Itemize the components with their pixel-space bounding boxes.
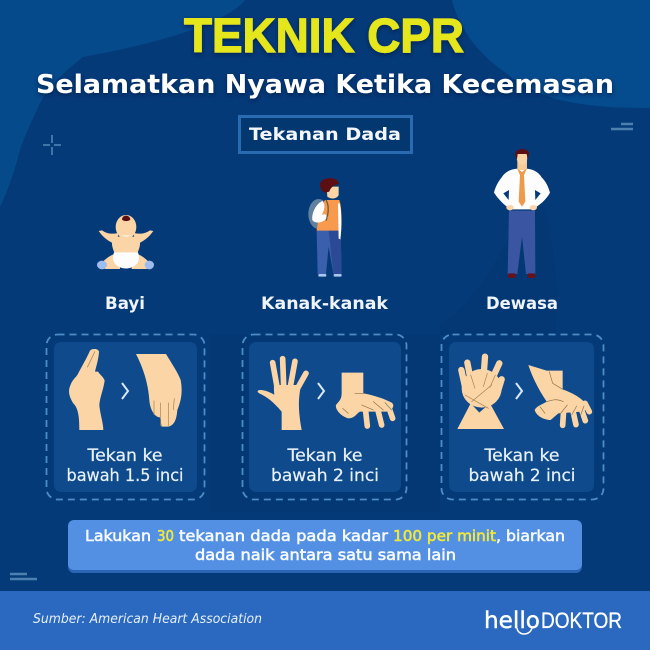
label: Kanak-kanak: Kanak-kanak: [261, 294, 389, 314]
callout text line 1: 30: [157, 527, 174, 545]
icon: sparkle decoration: [43, 135, 61, 155]
icon: adult man with tie: [494, 149, 550, 278]
heading: Tekanan Dada: Tekanan Dada: [249, 125, 401, 145]
text: bawah 2 inci: bawah 2 inci: [468, 466, 576, 485]
text: bawah 2 inci: bawah 2 inci: [271, 466, 379, 485]
icon: baby: [97, 215, 154, 269]
callout text line 1: Lakukan: [85, 527, 151, 545]
label: Dewasa: Dewasa: [486, 294, 558, 314]
logo: helloDOKTOR: hello: [484, 608, 540, 634]
icon: claw hand pressing: [336, 373, 393, 426]
icon: chevron: [122, 383, 128, 399]
label: Bayi: Bayi: [105, 294, 145, 314]
panel: Dewasa technique: [442, 334, 604, 500]
logo: helloDOKTOR: [484, 608, 622, 634]
logo: helloDOKTOR: DOKTOR: [541, 608, 622, 633]
callout: compression rate: [68, 520, 582, 573]
text: bawah 1.5 inci: bawah 1.5 inci: [66, 466, 184, 485]
icon: chevron: [516, 383, 522, 399]
icon: hands pressing chest: [528, 365, 589, 425]
icon: lines decoration bottom left: [10, 574, 37, 579]
panel: Kanak-kanak technique: [242, 334, 406, 500]
panel: Bayi technique: [46, 334, 204, 500]
text: Tekan ke: Tekan ke: [483, 446, 560, 465]
text: Tekan ke: Tekan ke: [86, 446, 162, 465]
subtitle: Selamatkan Nyawa Ketika Kecemasan: [36, 70, 614, 100]
icon: interlocked hands: [457, 357, 504, 429]
title: TEKNIK CPR: [184, 10, 464, 63]
callout text line 1: , biarkan: [496, 527, 565, 545]
heading: Tekanan Dada: [240, 116, 412, 152]
footer band: [0, 591, 650, 650]
icon: open hand: [258, 359, 306, 430]
icon: fingers pressing: [136, 354, 182, 427]
icon: child with backpack: [308, 178, 342, 277]
icon: lines decoration top right: [611, 124, 633, 129]
icon: two fingers hand: [69, 349, 105, 430]
source text: Sumber: American Heart Association: [33, 612, 262, 627]
icon: chevron: [318, 383, 324, 399]
callout text line 1: [85, 527, 565, 545]
callout text line 2: dada naik antara satu sama lain: [195, 546, 456, 564]
callout text line 1: tekanan dada pada kadar: [179, 527, 389, 545]
text: Tekan ke: Tekan ke: [286, 446, 362, 465]
callout text line 1: 100 per minit: [393, 527, 496, 545]
